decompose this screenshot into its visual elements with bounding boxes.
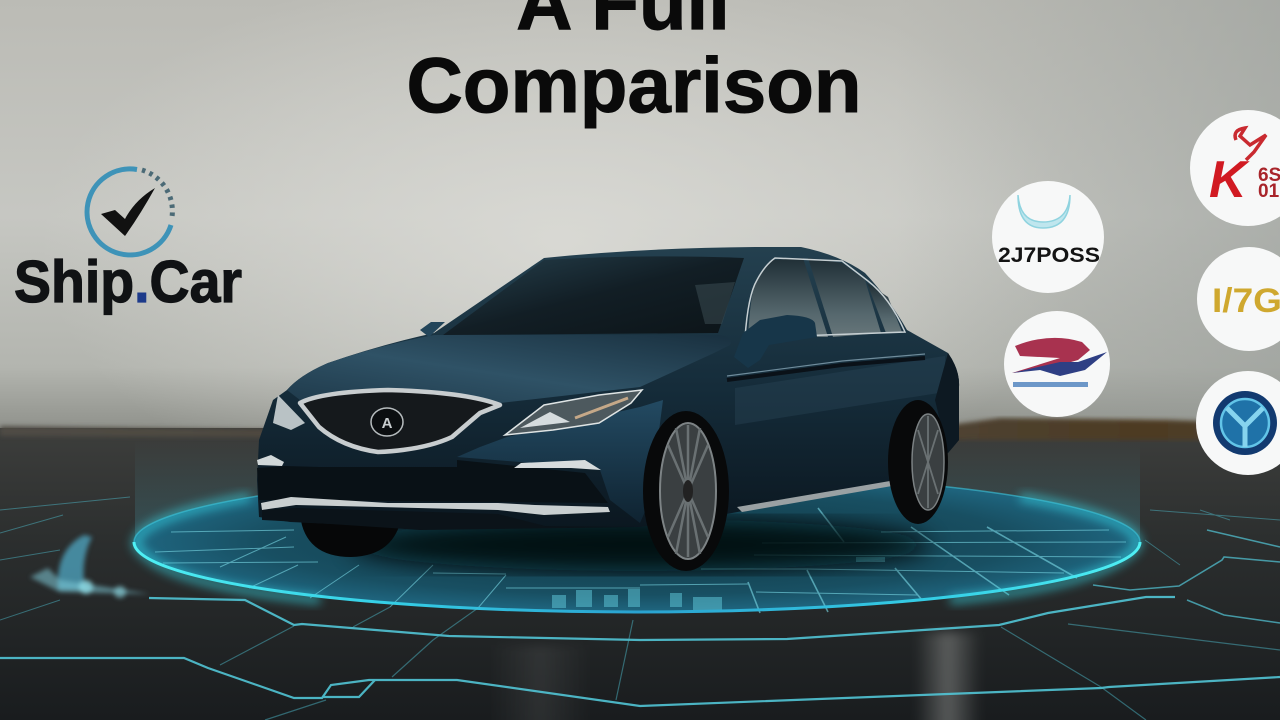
partner logo: red K: 01 xyxy=(1258,181,1280,202)
side windows xyxy=(745,258,905,338)
car xyxy=(257,247,959,571)
data blocks xyxy=(552,557,885,610)
windshield reflection xyxy=(695,282,735,324)
far front tyre xyxy=(300,515,402,557)
partner logo: red K: K xyxy=(1209,151,1250,209)
ground xyxy=(0,428,1280,720)
background sky xyxy=(0,0,1280,432)
logo: Ship.Car xyxy=(14,169,242,315)
map glow left xyxy=(30,535,150,598)
windshield xyxy=(443,256,744,335)
partner logo: blue circle xyxy=(1196,371,1280,475)
holographic platform xyxy=(134,440,1140,613)
light reflection bands on ground xyxy=(490,632,981,720)
front wheel near xyxy=(643,411,729,571)
map lines on the ground xyxy=(0,497,1280,720)
emblem: A xyxy=(382,415,393,432)
logo wordmark: Ship.Car xyxy=(14,249,242,315)
hood xyxy=(287,335,731,403)
partner logo: swoosh xyxy=(1004,311,1110,417)
logo icon: check circle xyxy=(87,169,172,255)
partner logo: Express: 2J7POSS xyxy=(998,244,1100,267)
partner logo: gold: I/7G xyxy=(1212,282,1280,320)
rear quarter dark panel xyxy=(935,353,959,453)
headlights xyxy=(273,390,642,435)
glowing rim xyxy=(136,497,320,600)
side mirrors xyxy=(420,315,817,368)
grille xyxy=(300,390,500,452)
bumper chrome xyxy=(257,455,640,530)
partner logo: gold xyxy=(1197,247,1280,351)
title xyxy=(406,0,862,129)
front fender panel xyxy=(457,400,663,523)
emblem xyxy=(371,408,403,436)
horizon band xyxy=(0,418,1280,440)
partner logo: Express xyxy=(992,181,1104,293)
lower intake xyxy=(257,460,608,503)
partner logo: red K xyxy=(1190,110,1280,226)
side sill chrome xyxy=(737,481,892,512)
rear wheel xyxy=(888,400,948,524)
car body xyxy=(257,247,959,528)
title: Comparison xyxy=(406,41,862,129)
door trim and reflections xyxy=(727,354,945,425)
